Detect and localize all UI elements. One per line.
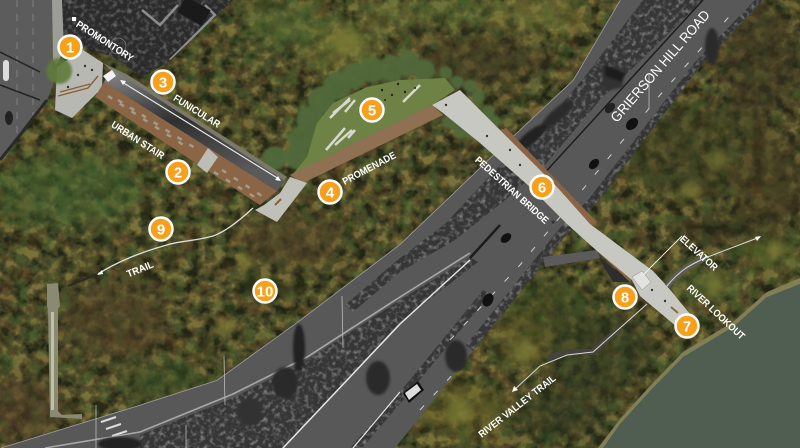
river valley trail arrow [512,304,647,392]
badge 5 [360,98,384,122]
promontory plaza [52,0,103,118]
badge 4 [318,180,342,204]
badge 10: 10 [257,284,273,300]
badge 9 [150,218,172,240]
badge 2 [166,160,190,184]
label: river lookout: RIVER LOOKOUT [684,283,746,342]
label: urban stair: URBAN STAIR [109,120,167,162]
label: pedestrian bridge: PEDESTRIAN BRIDGE [472,155,551,227]
badge 10 [254,280,276,302]
badge 3: 3 [159,74,167,92]
river lookout trail arrow [667,236,761,286]
badge 1 [58,36,82,58]
crosswalk [101,417,127,436]
badge 1: 1 [66,40,74,56]
label: promenade: PROMENADE [341,150,398,188]
neighbourhood greyscale [62,0,233,77]
label: funicular: FUNICULAR [171,93,222,131]
cars [403,101,640,403]
river [598,278,800,448]
badge 3 [152,70,174,94]
left road [0,0,53,160]
lawn with trees [263,52,500,175]
promenade boardwalk [290,105,443,183]
medians [140,0,762,448]
label: river valley trail: RIVER VALLEY TRAIL [477,373,558,440]
funicular [103,63,287,191]
lower landing [255,177,307,222]
badge 6: 6 [538,180,546,196]
badge 8: 8 [621,290,629,306]
label: grierson hill road: GRIERSON HILL ROAD [607,7,713,125]
badge 4: 4 [326,184,335,202]
pedestrian bridge [432,90,690,327]
foliage clusters [162,29,784,423]
badge 9: 9 [157,222,165,238]
badge 2: 2 [174,164,182,182]
road trees and shadows [98,28,719,448]
label marker square [72,17,76,21]
promontory tree [46,58,72,84]
lamp posts [96,75,649,448]
badge 8 [614,286,636,308]
label: elevator: ELEVATOR [677,234,720,274]
urban stair [95,82,277,205]
label: trail: TRAIL [125,260,155,280]
elevator [632,271,651,290]
stair landing [197,148,218,173]
stair to lower road [47,283,82,419]
badge 5: 5 [368,102,376,120]
badge 7: 7 [683,318,691,336]
badge 7 [676,314,698,338]
badge 6 [530,176,554,198]
label: promontory: PROMONTORY [74,19,135,65]
trail 9 [68,208,253,286]
elevator leader line [642,236,682,276]
